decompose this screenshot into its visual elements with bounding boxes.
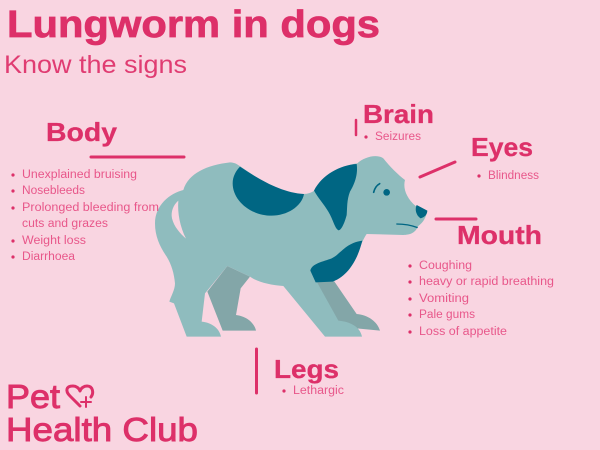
list: body signs: [11, 169, 159, 263]
logo: Pet Health Club: [6, 378, 198, 448]
ear: [314, 164, 357, 230]
title: Lungworm in dogs: [7, 4, 380, 46]
list: body signs: Nosebleeds: [22, 185, 85, 197]
list: mouth signs: Pale gums: [419, 309, 475, 321]
list: brain signs: Seizures: [375, 131, 421, 143]
logo wordmark: Health Club: Health Club: [6, 411, 198, 448]
panel: brain: [356, 99, 434, 143]
list: body signs: Weight loss: [22, 235, 86, 247]
connector line: brain: [355, 120, 357, 135]
dog body: [155, 156, 427, 337]
list: body signs: Prolonged bleeding from: [22, 202, 159, 214]
panel: body: [11, 117, 184, 263]
list: eyes signs: Blindness: [488, 170, 539, 182]
dog illustration: [155, 156, 427, 337]
list: mouth signs: Coughing: [419, 260, 472, 272]
nose: [416, 205, 427, 218]
list: mouth signs: Loss of appetite: [419, 326, 507, 338]
list: body signs: Unexplained bruising: [22, 169, 137, 181]
heading: eyes: Eyes: [471, 132, 533, 162]
connector line: eyes: [420, 162, 455, 177]
subtitle: Know the signs: [4, 51, 187, 79]
connector line: body: [91, 156, 184, 158]
eyebrow: [374, 184, 380, 192]
panel: eyes: [420, 132, 539, 182]
connector line: mouth: [436, 218, 476, 220]
back legs: [207, 266, 380, 331]
list: mouth signs: heavy or rapid breathing: [419, 276, 554, 288]
list: mouth signs: [408, 260, 554, 338]
tail gap: [172, 201, 186, 239]
eye: [383, 189, 390, 196]
heading: legs: Legs: [274, 354, 339, 384]
back patch: [233, 167, 304, 216]
logo icon: heart with plus: [67, 386, 93, 407]
mouth: [396, 224, 418, 228]
heading: mouth: Mouth: [457, 220, 542, 250]
list: body signs: Diarrhoea: [22, 251, 76, 263]
heading: brain: Brain: [363, 99, 434, 129]
chest patch: [310, 241, 362, 282]
logo wordmark: Pet: Pet: [6, 378, 60, 415]
list: body signs: cuts and grazes: [22, 218, 108, 230]
heading: body: Body: [46, 117, 118, 147]
panel: mouth: [408, 219, 554, 338]
list: mouth signs: Vomiting: [419, 293, 469, 305]
list: legs signs: Lethargic: [293, 385, 344, 397]
connector line: legs: [255, 349, 258, 393]
panel: legs: [256, 349, 344, 397]
